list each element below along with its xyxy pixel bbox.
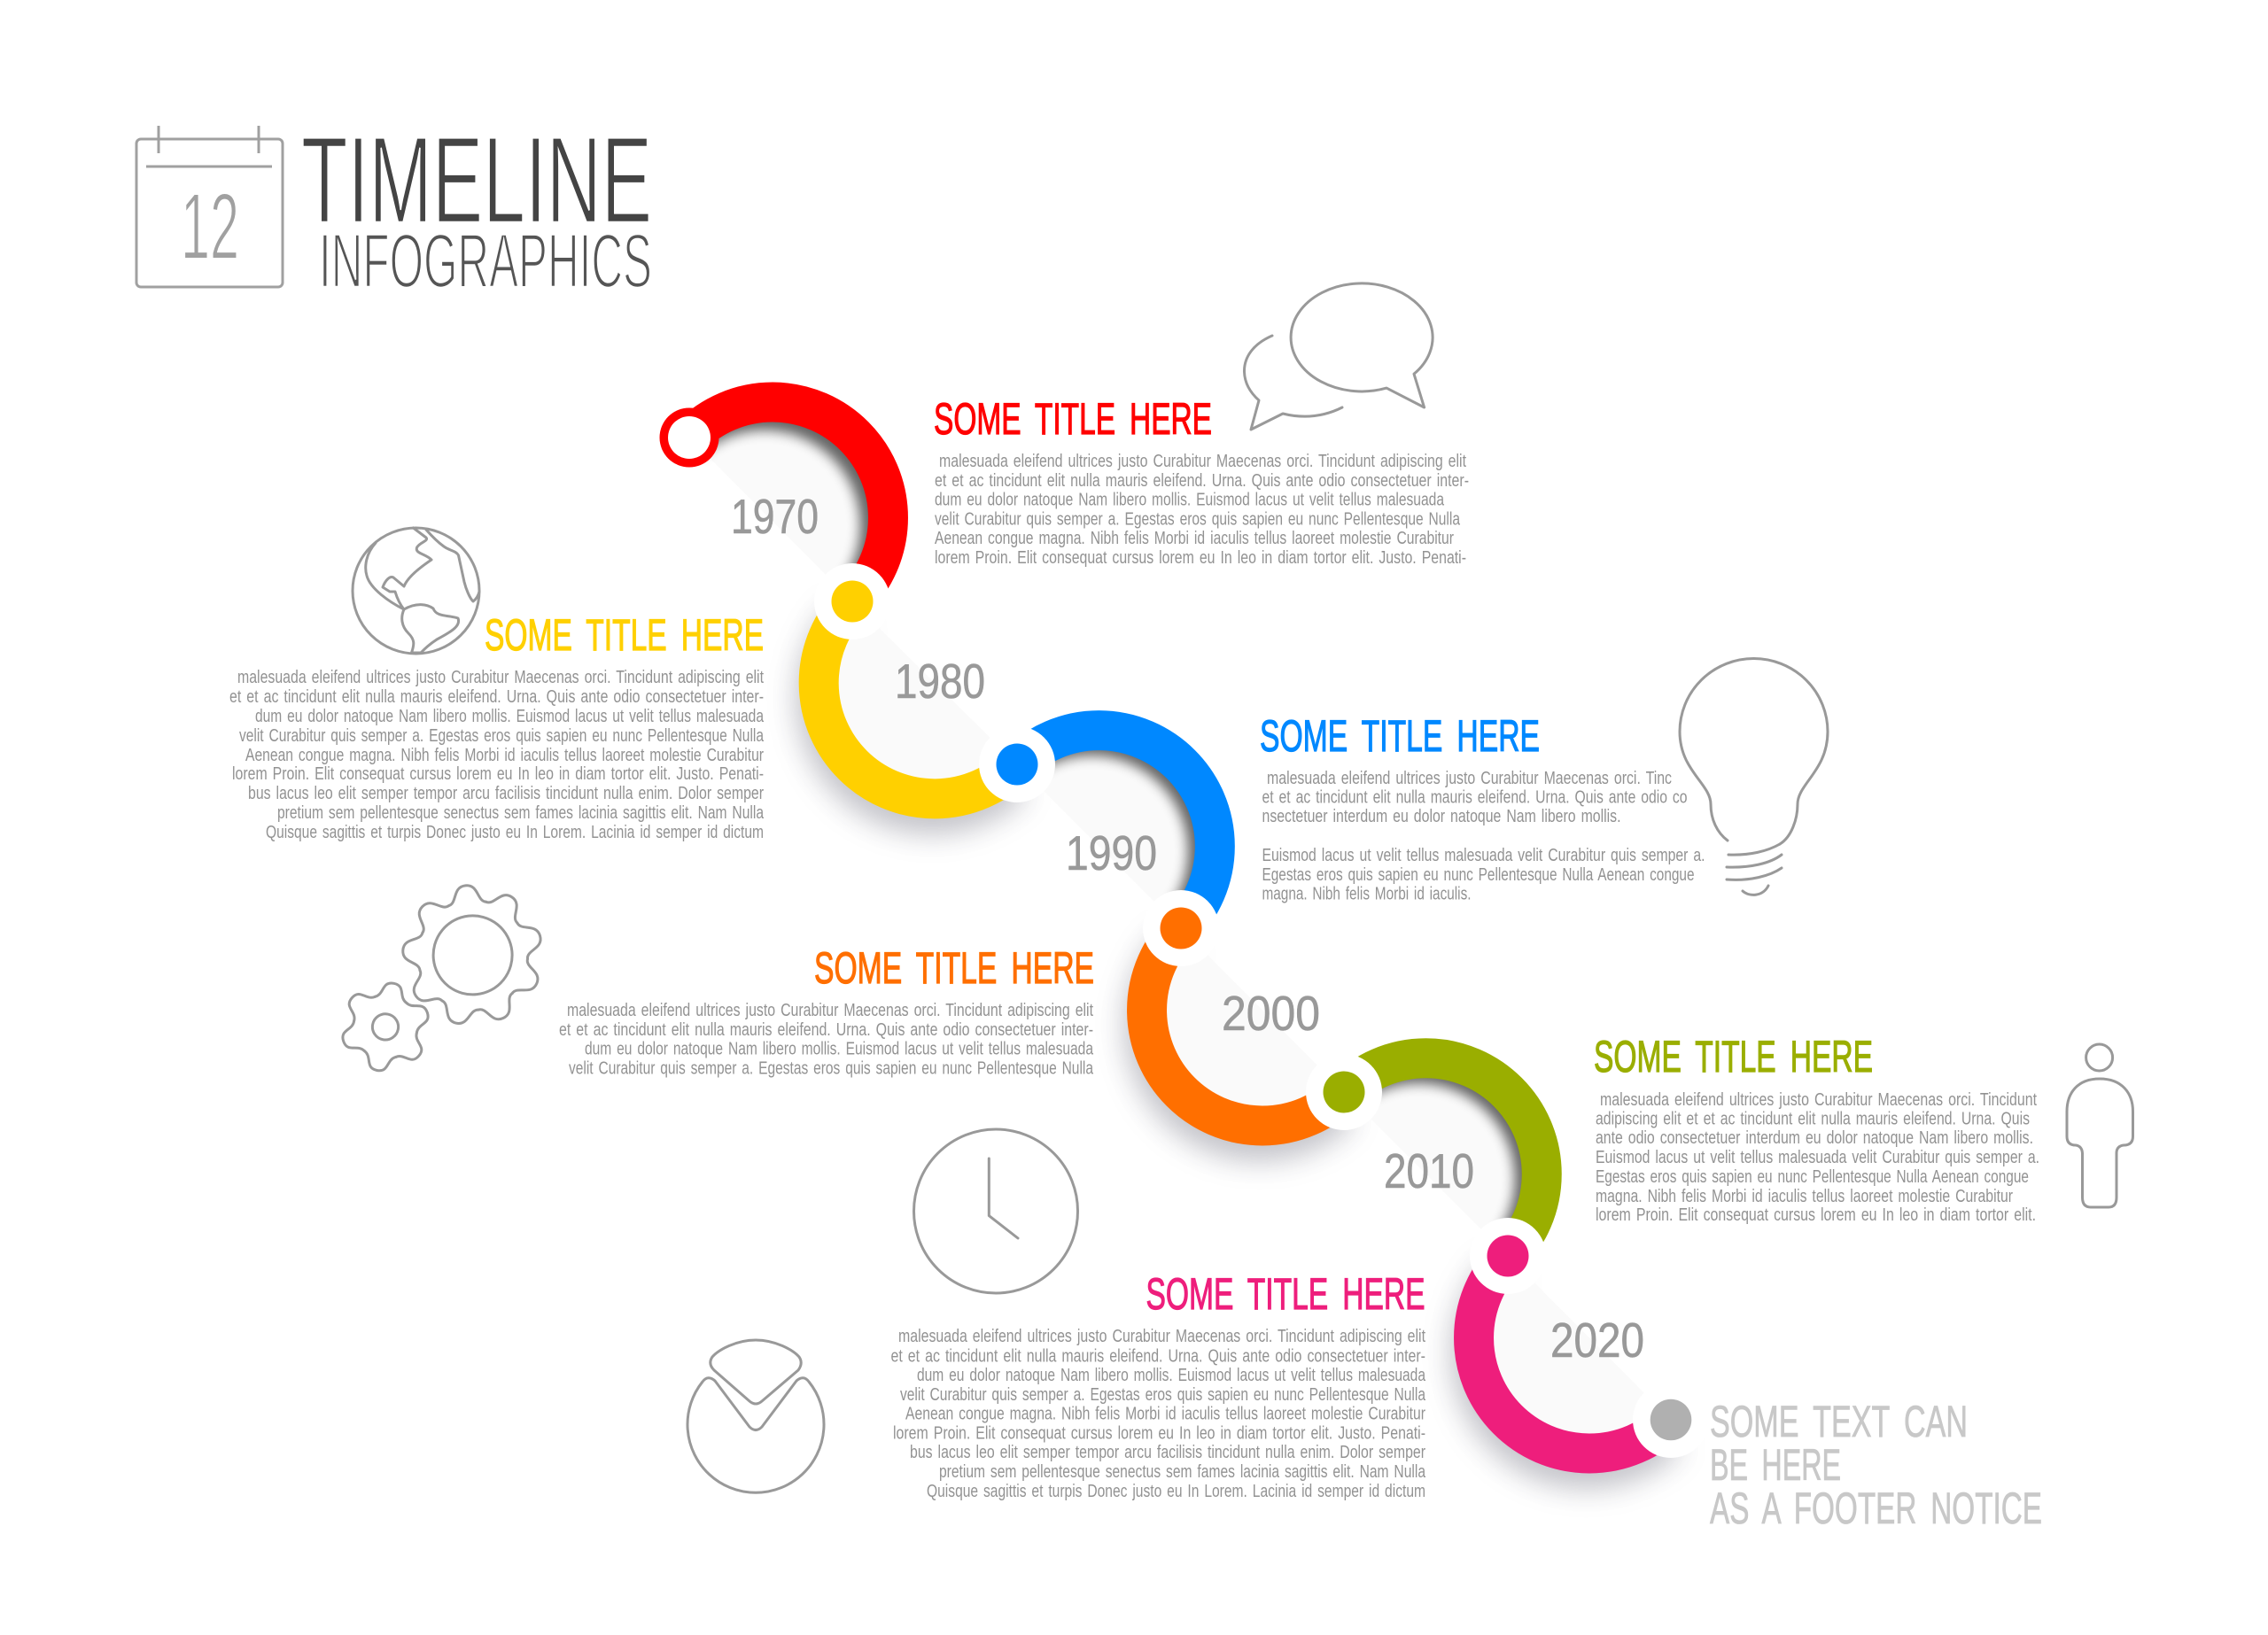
text block: green: Egestas eros quis sapien eu nunc Pellentesque Nulla Aenean congue: [1596, 1167, 2029, 1187]
text block: green: [1596, 1090, 2039, 1225]
icon: clock: [914, 1129, 1077, 1293]
panel: pink block: [891, 1269, 1426, 1501]
text block: pink: malesuada eleifend ultrices justo Curabitur Maecenas orci. Tincidunt adipiscing elit: [898, 1327, 1425, 1346]
text block: blue: magna. Nibh felis Morbi id iaculis.: [1262, 884, 1471, 903]
icon: calendar: [136, 126, 283, 287]
panel: yellow block: [229, 610, 765, 842]
panel: red block: [934, 394, 1469, 568]
panel: blue block: [1260, 711, 1705, 903]
text block: blue: nsectetuer interdum eu dolor natoque Nam libero mollis.: [1262, 807, 1621, 826]
node: pink dot: [1470, 1218, 1546, 1294]
text block: red: dum eu dolor natoque Nam libero mollis. Euismod lacus ut velit tellus malesuada: [935, 491, 1445, 510]
footer notice: BE HERE: [1710, 1440, 1841, 1490]
text block: yellow: pretium sem pellentesque senectus sem fames lacinia sagittis elit. Nam Nulla: [277, 803, 765, 823]
text block: yellow: et et ac tincidunt elit nulla mauris eleifend. Urna. Quis ante odio consectetuer inter-: [229, 687, 764, 707]
text block: orange: et et ac tincidunt elit nulla mauris eleifend. Urna. Quis ante odio consectetuer inter-: [559, 1020, 1093, 1040]
footer notice: AS A FOOTER NOTICE: [1710, 1484, 2042, 1533]
text block: red: et et ac tincidunt elit nulla mauris eleifend. Urna. Quis ante odio consectetuer inter-: [935, 471, 1469, 491]
text block: red: velit Curabitur quis semper a. Egestas eros quis sapien eu nunc Pellentesque Nulla: [935, 510, 1461, 530]
text block: pink: velit Curabitur quis semper a. Egestas eros quis sapien eu nunc Pellentesque Nulla: [900, 1385, 1426, 1405]
text block: red: lorem Proin. Elit consequat cursus lorem eu In leo in diam tortor elit. Justo. Penati-: [935, 548, 1466, 568]
icon: pie chart: [687, 1340, 824, 1492]
text block: orange: [559, 1001, 1094, 1079]
node: green dot: [1306, 1054, 1382, 1130]
text block: pink: pretium sem pellentesque senectus sem fames lacinia sagittis elit. Nam Nulla: [939, 1462, 1426, 1482]
timeline arc: 2020 pink: [1472, 1256, 1671, 1468]
icon: light bulb: [1680, 659, 1828, 895]
text block: yellow: Quisque sagittis et turpis Donec justo eu In Lorem. Lacinia id semper id dictum: [266, 823, 764, 842]
timeline arc: 1970 red: [659, 402, 888, 608]
subtitle: infographics: INFOGRAPHICS: [319, 219, 652, 304]
text block: yellow: velit Curabitur quis semper a. Egestas eros quis sapien eu nunc Pellentesque Nulla: [239, 726, 765, 746]
node: orange dot: [1143, 890, 1219, 966]
heading: red: SOME TITLE HERE: [934, 394, 1212, 444]
year 2010: 2010: [1384, 1143, 1474, 1198]
large gear: [393, 878, 552, 1034]
text block: red: malesuada eleifend ultrices justo Curabitur Maecenas orci. Tincidunt adipiscing elit: [939, 452, 1466, 471]
title: timeline: TIMELINE: [301, 112, 652, 249]
text block: green: Euismod lacus ut velit tellus malesuada velit Curabitur quis semper a.: [1596, 1148, 2039, 1167]
text block: pink: [891, 1327, 1426, 1501]
text block: orange: velit Curabitur quis semper a. Egestas eros quis sapien eu nunc Pellentesque Nulla: [569, 1059, 1094, 1079]
icon: gears: [331, 878, 552, 1079]
text block: yellow: bus lacus leo elit semper tempor arcu facilisis tincidunt nulla enim. Dolor semper: [248, 784, 764, 803]
year 1990: 1990: [1066, 825, 1157, 880]
timeline arc: 2010 green: [1337, 1058, 1542, 1261]
text block: green: adipiscing elit et et ac tincidunt elit nulla mauris eleifend. Urna. Quis: [1596, 1109, 2030, 1128]
node: blue dot: [979, 726, 1055, 802]
heading: pink: SOME TITLE HERE: [1146, 1269, 1425, 1319]
text block: blue: Egestas eros quis sapien eu nunc Pellentesque Nulla Aenean congue: [1262, 865, 1694, 885]
text block: orange: malesuada eleifend ultrices justo Curabitur Maecenas orci. Tincidunt adipiscing elit: [567, 1001, 1093, 1020]
node: gray end dot: [1633, 1382, 1709, 1458]
text block: pink: Aenean congue magna. Nibh felis Morbi id iaculis tellus laoreet molestie Curabitur: [905, 1405, 1425, 1424]
small gear: [331, 974, 439, 1079]
text block: yellow: malesuada eleifend ultrices justo Curabitur Maecenas orci. Tincidunt adipiscing elit: [237, 668, 764, 687]
text block: yellow: [229, 668, 765, 842]
heading: orange: SOME TITLE HERE: [814, 943, 1094, 993]
text block: yellow: dum eu dolor natoque Nam libero mollis. Euismod lacus ut velit tellus malesuada: [255, 707, 765, 726]
heading: blue: SOME TITLE HERE: [1260, 711, 1540, 761]
text block: blue: malesuada eleifend ultrices justo Curabitur Maecenas orci. Tinc: [1267, 769, 1672, 788]
text block: yellow: Aenean congue magna. Nibh felis Morbi id iaculis tellus laoreet molestie Curabitur: [245, 746, 764, 765]
timeline arc: 1990 blue: [1010, 731, 1215, 934]
text block: pink: dum eu dolor natoque Nam libero mollis. Euismod lacus ut velit tellus malesuada: [917, 1366, 1426, 1385]
year 2000: 2000: [1222, 986, 1320, 1041]
text block: pink: bus lacus leo elit semper tempor arcu facilisis tincidunt nulla enim. Dolor semper: [910, 1443, 1425, 1462]
text block: blue: Euismod lacus ut velit tellus malesuada velit Curabitur quis semper a.: [1262, 846, 1705, 865]
node: yellow dot: [814, 563, 890, 639]
text block: yellow: lorem Proin. Elit consequat cursus lorem eu In leo in diam tortor elit. Justo. Penati-: [232, 764, 764, 784]
icon: globe: [353, 528, 479, 654]
text block: green: ante odio consectetuer interdum eu dolor natoque Nam libero mollis.: [1596, 1128, 2033, 1148]
panel: green block: [1594, 1032, 2039, 1225]
text block: pink: Quisque sagittis et turpis Donec justo eu In Lorem. Lacinia id semper id dictum: [927, 1482, 1425, 1501]
year 1980: 1980: [895, 654, 985, 709]
text block: red: [935, 452, 1469, 568]
text block: green: lorem Proin. Elit consequat cursus lorem eu In leo in diam tortor elit.: [1596, 1205, 2036, 1225]
year 2020: 2020: [1550, 1313, 1644, 1368]
text block: pink: et et ac tincidunt elit nulla mauris eleifend. Urna. Quis ante odio consectetuer inter-: [891, 1346, 1425, 1366]
text block: orange: dum eu dolor natoque Nam libero mollis. Euismod lacus ut velit tellus malesuada: [585, 1040, 1094, 1059]
panel: orange block: [559, 943, 1094, 1079]
icon: person: [2067, 1044, 2133, 1207]
text block: green: magna. Nibh felis Morbi id iaculis tellus laoreet molestie Curabitur: [1596, 1187, 2013, 1206]
footer notice: [1710, 1397, 2042, 1533]
text block: blue: et et ac tincidunt elit nulla mauris eleifend. Urna. Quis ante odio co: [1262, 788, 1687, 808]
icon: calendar: 12: [181, 174, 239, 279]
timeline arc: 1980 yellow: [816, 601, 1017, 814]
timeline arc: 2000 orange: [1145, 928, 1344, 1141]
text block: red: Aenean congue magna. Nibh felis Morbi id iaculis tellus laoreet molestie Curabitur: [935, 529, 1454, 548]
heading: yellow: SOME TITLE HERE: [485, 610, 764, 660]
text block: blue: [1262, 769, 1705, 903]
text block: green: malesuada eleifend ultrices justo Curabitur Maecenas orci. Tincidunt: [1600, 1090, 2037, 1110]
text block: pink: lorem Proin. Elit consequat cursus lorem eu In leo in diam tortor elit. Justo. Penati-: [893, 1424, 1425, 1444]
year 1970: 1970: [731, 489, 819, 544]
header: [136, 112, 652, 304]
footer notice: SOME TEXT CAN: [1710, 1397, 1968, 1446]
icon: speech bubbles: [1244, 283, 1433, 430]
heading: green: SOME TITLE HERE: [1594, 1032, 1873, 1081]
